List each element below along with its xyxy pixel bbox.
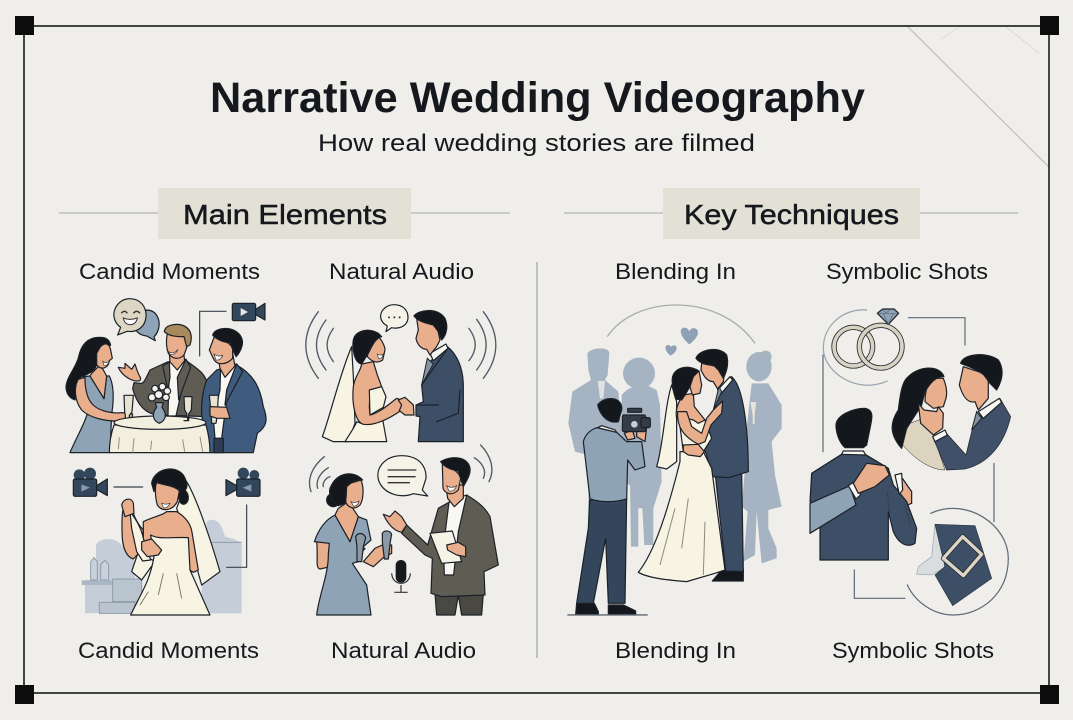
illustration: bride getting ready [73, 468, 260, 615]
room background [82, 520, 242, 613]
subtitle: How real wedding stories are filmed [318, 130, 755, 157]
label: Blending In bottom: Blending In [615, 638, 736, 663]
title: Narrative Wedding Videography [210, 74, 865, 122]
icon: rings with diamond [834, 309, 902, 368]
icon: video camera [232, 303, 265, 321]
man [383, 458, 498, 615]
guests silhouettes [568, 348, 782, 563]
videographer [576, 399, 650, 614]
label: Natural Audio bottom: Natural Audio [331, 638, 476, 663]
icon: microphone [392, 560, 410, 592]
illustration: blending in [567, 305, 782, 615]
icon: speech bubble [378, 456, 428, 496]
heading: Key Techniques [663, 188, 920, 239]
label: Candid Moments bottom: Candid Moments [78, 638, 259, 663]
illustration: candid moments at table [66, 299, 266, 453]
veil [177, 482, 220, 585]
icon: sound waves [309, 445, 492, 492]
illustration: natural audio couple [306, 305, 496, 442]
heading: Main Elements [158, 188, 411, 239]
illustration: woman and man with microphones [309, 445, 498, 615]
icon: speech bubbles [114, 299, 159, 341]
woman [66, 337, 133, 453]
icon: speech bubble [381, 305, 408, 332]
groom [398, 311, 463, 442]
heading: Main Elements: Main Elements [183, 199, 387, 230]
table [109, 383, 210, 453]
couple in circle [892, 355, 1011, 470]
icon: sound waves [306, 312, 496, 378]
decorative arc [607, 305, 755, 343]
label: Symbolic Shots bottom: Symbolic Shots [832, 638, 994, 663]
bride [322, 330, 405, 442]
icon: suit pocket detail [917, 524, 992, 606]
heading: Key Techniques: Key Techniques [684, 199, 899, 230]
icon: camera right [226, 468, 260, 496]
illustration: symbolic shots [810, 309, 1011, 615]
bride [122, 469, 210, 615]
center man [118, 324, 208, 417]
bride [638, 367, 725, 582]
man from behind [810, 408, 917, 560]
icon: hearts [665, 328, 698, 356]
label: Candid Moments top: Candid Moments [79, 259, 260, 284]
veil [657, 385, 677, 469]
decorative circle arcs and lines [823, 310, 1008, 615]
woman [314, 474, 392, 615]
label: Blending In top: Blending In [615, 259, 736, 284]
label: Natural Audio top: Natural Audio [329, 259, 474, 284]
icon: camera left [73, 468, 107, 496]
groom [696, 349, 748, 581]
label: Symbolic Shots top: Symbolic Shots [826, 259, 988, 284]
right man [202, 328, 266, 453]
